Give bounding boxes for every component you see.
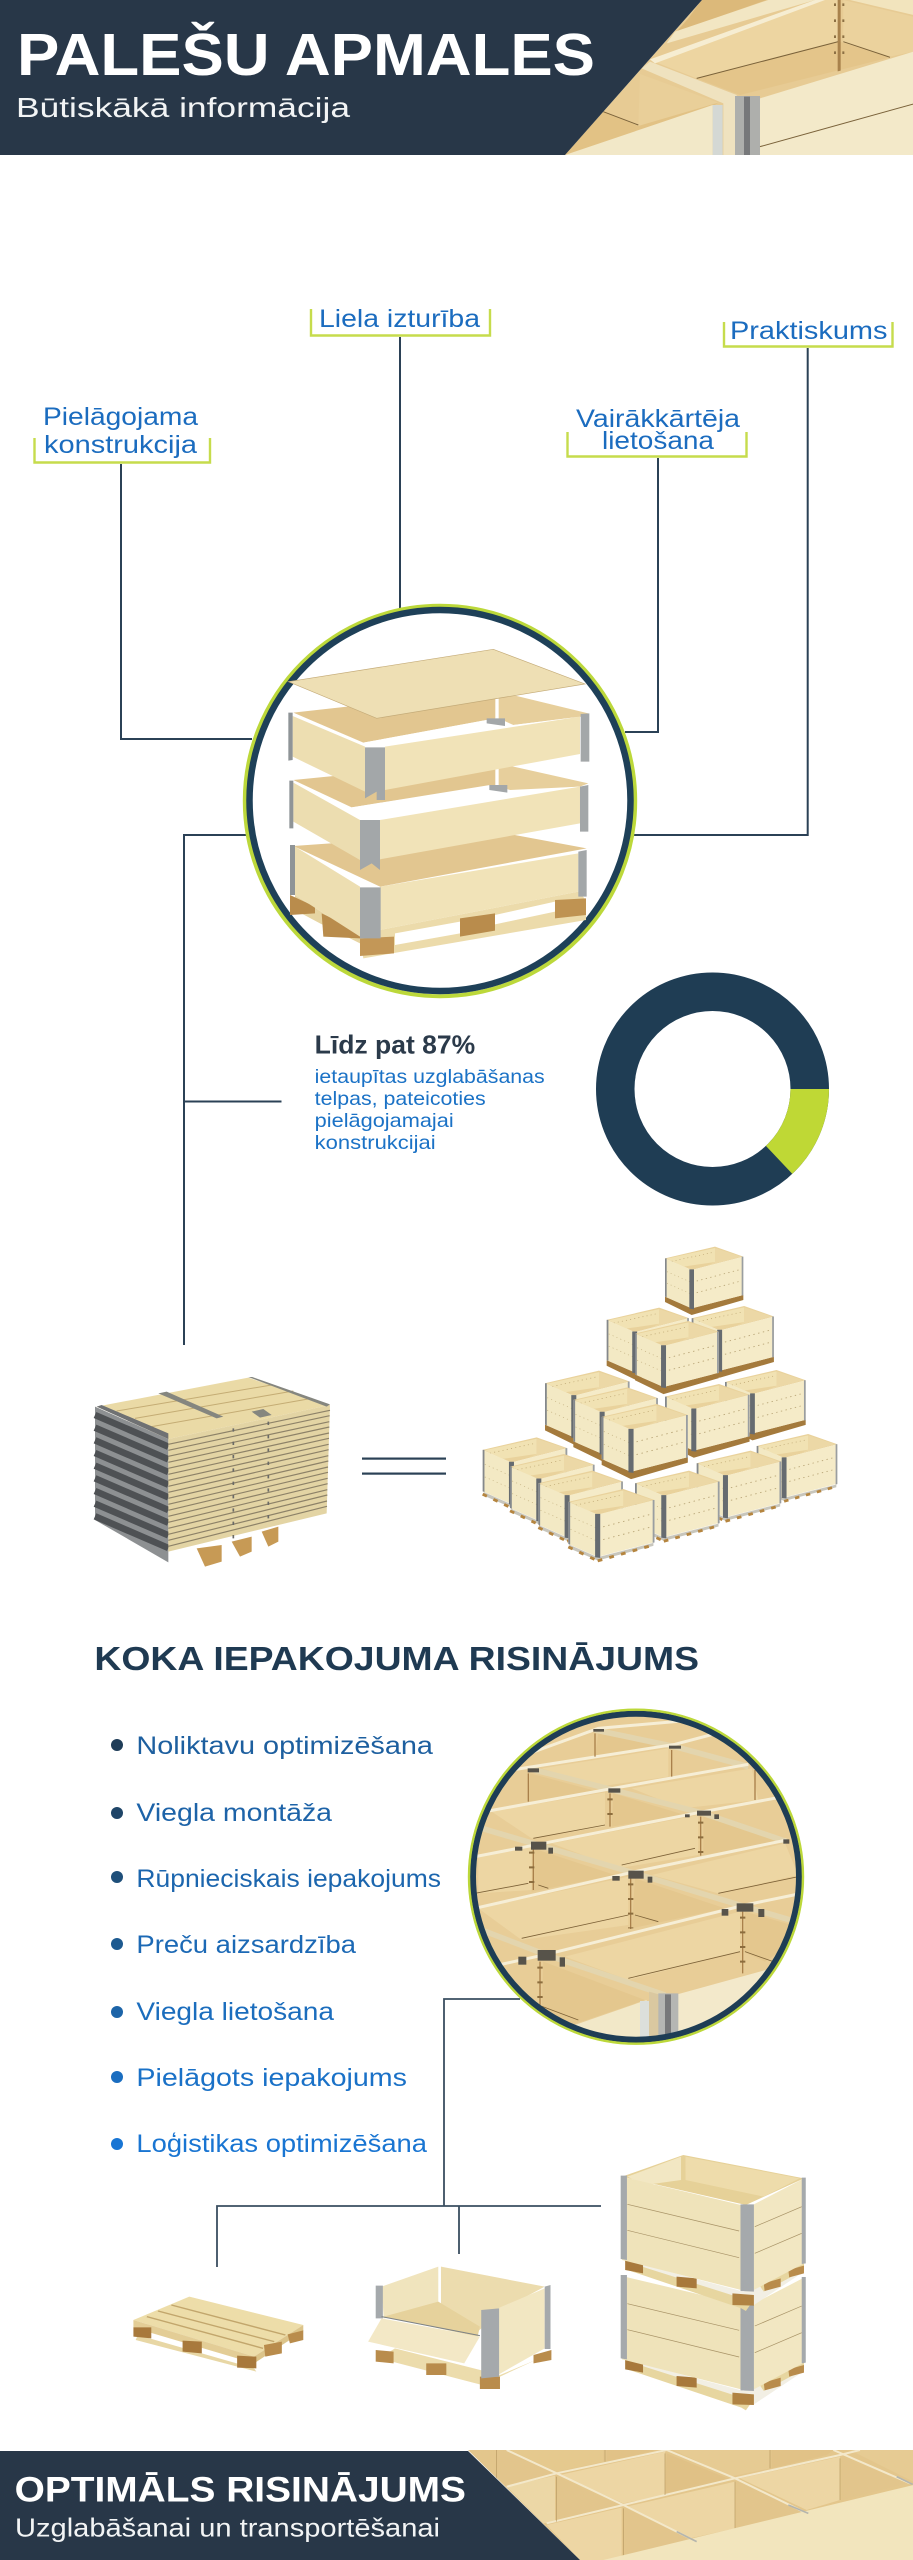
footer background — [0, 2451, 580, 2560]
header background — [0, 0, 702, 155]
central circle with exploded pallet collar stack — [245, 606, 635, 996]
label: Vairākkārtēja lietošana: Vairākkārtēja — [576, 405, 740, 433]
footer title: OPTIMĀLS RISINĀJUMS — [15, 2471, 466, 2510]
circle photo: grid of collars — [465, 1705, 810, 2050]
label: Praktiskums: Praktiskums — [730, 317, 888, 345]
circle rings — [473, 1714, 799, 2040]
illustration: pallet and collars — [288, 649, 589, 958]
item: Rūpnieciskais iepakojums: Rūpnieciskais iepakojums — [136, 1865, 441, 1893]
bottom collar — [293, 832, 587, 887]
stack of folded collars — [95, 1377, 330, 1567]
label: Pielāgojama konstrukcija: konstrukcija — [44, 431, 197, 459]
pallet — [295, 895, 360, 943]
equals sign — [362, 1458, 446, 1475]
label: Liela izturība: Liela izturība — [319, 305, 480, 333]
callout: storage savings text: Līdz pat 87% — [315, 1030, 475, 1060]
pyramid of stacked collars — [483, 1247, 837, 1561]
callout: storage savings text — [315, 1030, 545, 1154]
upper unit — [621, 2155, 806, 2311]
item: Noliktavu optimizēšana: Noliktavu optimizēšana — [136, 1732, 433, 1760]
footer photo: collar grid — [460, 2450, 913, 2560]
top collar — [293, 690, 495, 743]
item: Viegla lietošana: Viegla lietošana — [136, 1998, 334, 2026]
callout: storage savings text: telpas, pateicoties — [315, 1088, 486, 1110]
label: Vairākkārtēja lietošana: lietošana — [602, 427, 714, 455]
label: Pielāgojama konstrukcija: Pielāgojama — [43, 403, 198, 431]
callout: storage savings text: konstrukcijai — [315, 1132, 436, 1154]
header photo: pallet collars — [560, 0, 913, 157]
pallet feet — [197, 1545, 222, 1567]
subtitle: Būtiskākā informācija — [16, 92, 351, 123]
product: two stacked collars — [621, 2155, 806, 2410]
title: PALEŠU APMALES — [17, 21, 595, 88]
lid — [288, 649, 585, 718]
connector lines to bottom products — [217, 1999, 601, 2267]
lower unit — [621, 2275, 806, 2410]
header banner — [0, 0, 913, 157]
section heading: KOKA IEPAKOJUMA RISINĀJUMS — [94, 1641, 699, 1678]
label: Vairākkārtēja lietošana — [568, 405, 746, 456]
footer banner — [0, 2450, 913, 2560]
callout: storage savings text: ietaupītas uzglabāšanas — [315, 1066, 545, 1088]
item: Viegla montāža: Viegla montāža — [136, 1799, 332, 1827]
footer subtitle: Uzglabāšanai un transportēšanai — [15, 2513, 440, 2543]
item: Preču aizsardzība: Preču aizsardzība — [136, 1931, 356, 1959]
item: Loģistikas optimizēšana: Loģistikas optimizēšana — [136, 2130, 427, 2158]
label: Pielāgojama konstrukcija — [34, 403, 210, 462]
middle collar — [293, 760, 495, 807]
lattice of wooden cells — [476, 1720, 796, 2037]
connector lines to central circle — [121, 337, 808, 1345]
item: Pielāgots iepakojums: Pielāgots iepakojums — [136, 2064, 407, 2092]
callout: storage savings text: pielāgojamajai — [315, 1110, 454, 1132]
donut chart: 87 percent — [615, 992, 829, 1186]
bullet list — [111, 1732, 441, 2158]
product: collar with drop-down door — [368, 2267, 551, 2389]
product: bare pallet — [133, 2297, 303, 2372]
